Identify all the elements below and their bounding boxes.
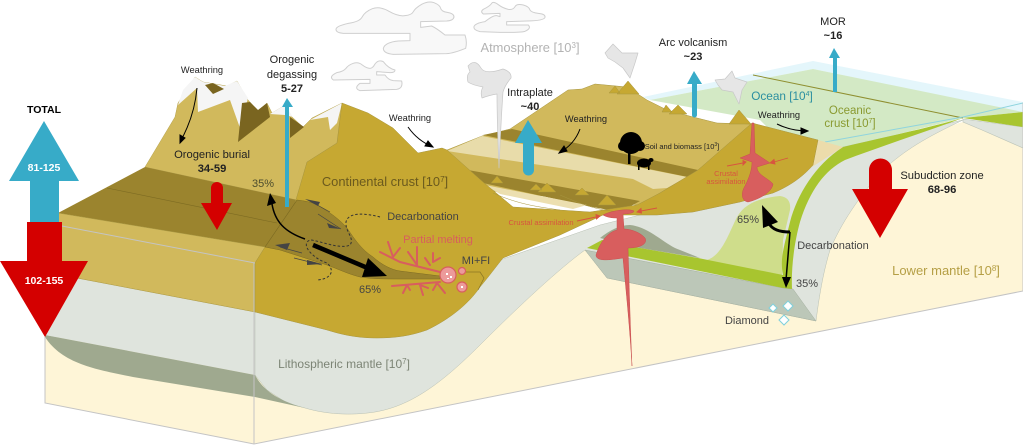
label: orogenic degassing: degassing: [267, 69, 317, 81]
icon: magma intrusion lower: [596, 210, 646, 366]
label: MOR: MOR: [820, 16, 846, 28]
label: lower mantle: 8: [992, 264, 997, 273]
label: oceanic crust: crust [10: [824, 118, 868, 130]
label: continental crust: ]: [445, 174, 448, 189]
label: MI+FI: MI+FI: [462, 255, 490, 267]
icon: sheep: [637, 158, 654, 170]
panel: lower mantle: [45, 122, 1023, 444]
label: orogenic burial: Orogenic burial: [174, 149, 250, 161]
icon: volcanic mounds: [491, 81, 751, 205]
label: oceanic crust: ]: [872, 118, 876, 130]
label: subduction zone: 68-96: [928, 184, 956, 196]
label: lower mantle: ]: [996, 263, 1000, 278]
arrow: total flux down: [0, 222, 88, 337]
label: weathering ocean: Weathring: [758, 110, 800, 120]
label: orogenic burial: 34-59: [198, 163, 226, 175]
callout line MI+FI: [466, 272, 484, 290]
plateau lower dark band: [468, 170, 640, 212]
label: ocean: ]: [810, 89, 813, 103]
panel: subducting slab: [587, 118, 963, 289]
layer lines: [107, 188, 297, 247]
panel: beige wedge: [812, 140, 843, 167]
panel: continental crust: [255, 103, 818, 338]
arrow: subduction zone: [852, 158, 908, 238]
panel: light green melt zone: [707, 196, 790, 275]
panel: right oceanic crust: [963, 112, 1023, 127]
label: orogenic degassing: 5-27: [281, 83, 303, 95]
label: arc volcanism: Arc volcanism: [659, 37, 727, 49]
icon: volcanic plumes: [467, 44, 747, 168]
label: decarbonation: Decarbonation: [387, 211, 459, 223]
panel: lithospheric mantle dark band: [45, 335, 305, 408]
arrow: intraplate: [515, 120, 542, 176]
label: continental crust: Continental crust [10: [322, 174, 440, 189]
label: right decarbonation: Decarbonation: [797, 240, 869, 252]
icon: clouds: [331, 2, 545, 91]
label: total down value: 102-155: [25, 275, 63, 287]
panel: ocean surface band: [643, 61, 1023, 113]
label: intraplate: ~40: [521, 101, 539, 113]
plateau upper dark band: [483, 129, 698, 177]
icon: assimilation arrows: [577, 158, 788, 221]
label: subduction zone: Subudction zone: [900, 170, 984, 182]
label: weathering plateau: Weathring: [565, 114, 607, 124]
panel: left lithospheric mantle face: [45, 272, 255, 375]
crust inner lines: [493, 193, 620, 212]
plateau cream band: [447, 136, 687, 189]
label: diamond: Diamond: [725, 315, 769, 327]
label: total up value: 81-125: [28, 162, 61, 174]
label: lithospheric mantle: 7: [402, 357, 407, 366]
label: soil and biomass: ]: [717, 142, 719, 151]
label: atmosphere: Atmosphere [10: [480, 40, 571, 55]
panel: right oceanic lithosphere: [963, 119, 1023, 148]
icon: partial melting veins: [380, 242, 445, 295]
plateau cream strips: [485, 185, 587, 209]
label: atmosphere: 3: [571, 41, 576, 50]
panel: ocean: [650, 69, 1023, 160]
panel: orogenic top surface: [58, 167, 297, 247]
label: oceanic crust: Oceanic: [829, 105, 871, 117]
label: MOR: ~16: [824, 30, 842, 42]
label: intraplate: Intraplate: [507, 87, 553, 99]
icon: tree: [618, 132, 645, 164]
panel: slab underside: [585, 250, 816, 321]
label: crustal assimilation upper: assimilation: [706, 177, 746, 186]
panel: left crust face: [45, 210, 265, 312]
label: ocean: Ocean [10: [751, 89, 806, 103]
label: arc volcanism: ~23: [684, 51, 702, 63]
icon: snow caps: [178, 77, 342, 130]
arrow: 35 percent right: [782, 232, 791, 288]
label: left 65 percent: 65%: [359, 284, 381, 296]
label: oceanic crust: 7: [868, 118, 872, 125]
icon: melt inclusions: [440, 267, 467, 292]
arrow: orogenic degassing: [282, 98, 293, 207]
arrow: 35 percent left: [267, 193, 305, 239]
label: crustal assimilation upper: Crustal: [714, 169, 738, 178]
label: lithospheric mantle: Lithospheric mantle [10: [278, 357, 402, 371]
dashed decarbonation path: [306, 214, 380, 280]
label: lithospheric mantle: ]: [407, 357, 410, 371]
arrow: arc volcanism: [687, 71, 702, 118]
label: partial melting: Partial melting: [403, 234, 473, 246]
arrows: weathering: [180, 88, 808, 153]
label: soil and biomass: Soil and biomass [10: [645, 142, 714, 151]
label: weathering mountain: Weathring: [181, 65, 223, 75]
arrow: 65 percent right: [762, 205, 790, 232]
label: soil and biomass: 3: [714, 142, 717, 148]
arrow: total flux up: [9, 121, 79, 222]
ridge line: [753, 75, 963, 118]
panel: shear zone: [265, 200, 440, 279]
label: atmosphere: ]: [576, 40, 580, 55]
label: weathering crust: Weathring: [389, 113, 431, 123]
label: right 65 percent: 65%: [737, 214, 759, 226]
icon: magma intrusion upper: [740, 123, 773, 202]
panel: mountain range: [145, 77, 342, 200]
icon: shear arrows: [275, 199, 341, 265]
arrow: orogenic burial: [201, 182, 232, 230]
label: continental crust: 7: [440, 175, 445, 184]
icon: mountain shadows: [205, 83, 304, 142]
label: total: TOTAL: [27, 104, 62, 116]
label: orogenic degassing: Orogenic: [270, 54, 315, 66]
label: right 35 percent: 35%: [796, 278, 818, 290]
box edges: [45, 103, 1023, 444]
icon: diamonds: [769, 301, 793, 325]
arrow: 65 percent left: [313, 245, 387, 277]
label: ocean: 4: [806, 91, 810, 98]
label: left 35 percent: 35%: [252, 178, 274, 190]
label: crustal assimilation lower: Crustal assimilation: [508, 218, 574, 227]
label: lower mantle: Lower mantle [10: [892, 263, 992, 278]
panel: plateau: [447, 84, 752, 212]
ocean floor line: [825, 103, 1023, 142]
arrow: MOR: [829, 48, 840, 92]
panel: lithospheric mantle: [255, 120, 963, 414]
panel: hump shadow: [600, 225, 700, 258]
